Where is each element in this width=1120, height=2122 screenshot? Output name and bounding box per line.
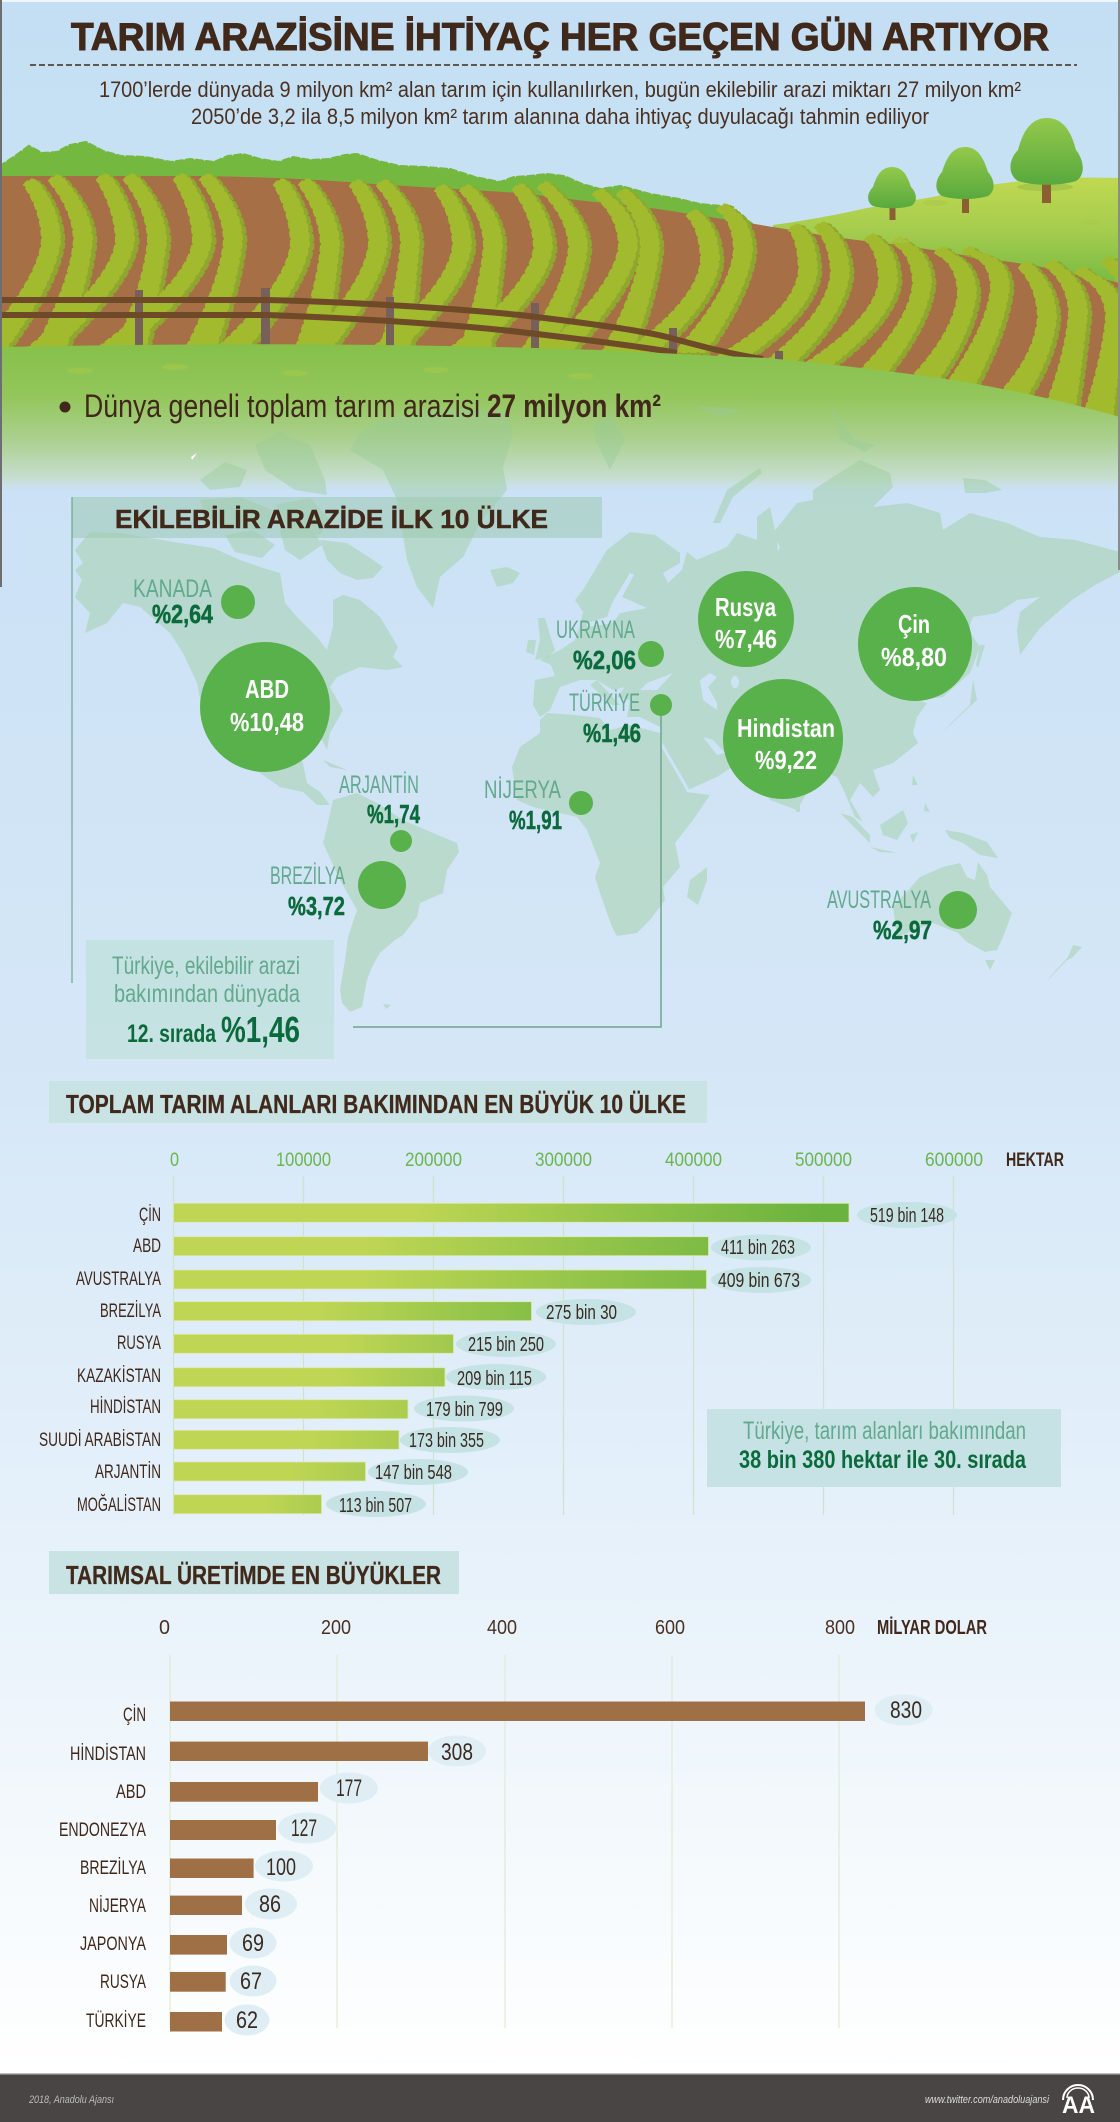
- callout: Türkiye farmland rank: 38 bin 380 hektar ile 30. sırada: [739, 1446, 1027, 1474]
- foreground meadow: [0, 344, 1120, 490]
- callout: world farmland total: Dünya geneli toplam tarım arazisi: [84, 388, 480, 424]
- country labels: production: ENDONEZYA: [59, 1820, 146, 1841]
- bubble: Nijerya: [484, 775, 593, 835]
- map: Australia and New Zealand: [893, 862, 1082, 980]
- country labels: farmland: BREZİLYA: [100, 1301, 161, 1322]
- value circles: [224, 1694, 933, 2036]
- axis labels: hectares: 0: [170, 1150, 179, 1171]
- bubble: Kanada: %2,64: [152, 599, 213, 629]
- heading: arable land: [72, 497, 602, 538]
- callout: Türkiye arable rank: %1,46: [221, 1009, 300, 1050]
- bubble: ABD: %10,48: [230, 707, 304, 737]
- icon: large tree: [1010, 118, 1083, 203]
- values: farmland: 147 bin 548: [375, 1462, 452, 1484]
- heading: total farmland: [49, 1081, 707, 1123]
- map: inland seas: [333, 573, 739, 790]
- values: production: 830: [890, 1697, 922, 1724]
- axis labels: billion dollars: 200: [321, 1617, 351, 1639]
- axis labels: hectares: 400000: [665, 1150, 722, 1171]
- bubble: Hindistan: %9,22: [755, 745, 817, 775]
- bubble: Ukrayna: %2,06: [573, 645, 636, 675]
- values: farmland: 519 bin 148: [870, 1205, 944, 1227]
- bubble: Türkiye: %1,46: [583, 718, 641, 748]
- country labels: production: RUSYA: [100, 1972, 146, 1993]
- country labels: farmland: MOĞALİSTAN: [77, 1494, 161, 1516]
- bubble: Rusya: Rusya: [715, 592, 776, 622]
- values: production: 100: [266, 1854, 296, 1881]
- values: production: [236, 1697, 922, 2034]
- values: farmland: 209 bin 115: [457, 1368, 532, 1390]
- country labels: farmland: HİNDİSTAN: [90, 1397, 161, 1418]
- bars: farmland by country: [174, 1203, 849, 1514]
- axis labels: hectares: 100000: [276, 1150, 331, 1171]
- icon: small tree: [868, 167, 916, 220]
- panel: total farmland bar chart: [39, 1081, 1064, 1517]
- wooden fence: [0, 288, 783, 361]
- values: production: 308: [441, 1739, 473, 1766]
- bubble: Hindistan: [723, 679, 843, 799]
- callout: Türkiye farmland rank: Türkiye, tarım alanları bakımından: [743, 1417, 1026, 1445]
- subtitle text block: 1700’lerde dünyada 9 milyon km² alan tarım için kullanılırken, bugün ekilebilir arazi miktarı 27 milyon km²: [99, 77, 1021, 102]
- bubble: Brezilya: [270, 861, 406, 921]
- country labels: farmland: RUSYA: [117, 1333, 161, 1354]
- values: production: 86: [259, 1891, 281, 1918]
- bubble: Kanada: KANADA: [133, 575, 212, 603]
- values: farmland: 275 bin 30: [546, 1302, 617, 1324]
- bubble: Çin: Çin: [898, 609, 930, 639]
- axis labels: billion dollars: [159, 1616, 987, 1639]
- axis labels: hectares: 600000: [925, 1150, 983, 1171]
- subtitle text block: 2050’de 3,2 ila 8,5 milyon km² tarım alanına daha ihtiyaç duyulacağı tahmin ediliyor: [191, 104, 929, 129]
- panel: agricultural production bar chart: [49, 1551, 987, 2036]
- country labels: production: TÜRKİYE: [86, 2011, 146, 2032]
- country labels: farmland: ABD: [133, 1236, 161, 1257]
- subtitle text block: [99, 77, 1021, 129]
- icon: AA logo: AA: [1062, 2092, 1095, 2119]
- hill with grass: [773, 178, 1120, 300]
- ploughed brown field: [0, 176, 1120, 440]
- panel: world map background: [75, 405, 1120, 1012]
- values: production: 177: [336, 1775, 362, 1802]
- map: South-East Asia islands: [840, 775, 998, 858]
- bubble: Brezilya: BREZİLYA: [270, 861, 345, 890]
- callout: Türkiye arable rank: 12. sırada: [127, 1020, 217, 1048]
- country labels: farmland: ÇİN: [139, 1205, 161, 1226]
- callout: Türkiye arable rank: bakımından dünyada: [114, 980, 300, 1008]
- map: Eurasia: [533, 460, 1120, 822]
- callout: Türkiye arable rank: Türkiye, ekilebilir arazi: [112, 952, 300, 980]
- country labels: farmland: KAZAKİSTAN: [77, 1366, 161, 1387]
- values: farmland: 411 bin 263: [721, 1237, 795, 1259]
- bubble: Brezilya: %3,72: [288, 891, 345, 921]
- bubble: Avustralya: AVUSTRALYA: [827, 886, 931, 914]
- bubble: Arjantin: [339, 770, 420, 852]
- axis labels: hectares: 200000: [405, 1150, 462, 1171]
- crop rows: [0, 174, 1120, 432]
- axis labels: billion dollars: 600: [655, 1617, 685, 1639]
- bubble: Ukrayna: UKRAYNA: [556, 616, 635, 644]
- panel: footer: [0, 2073, 1120, 2122]
- bubble: Nijerya: %1,91: [509, 805, 562, 835]
- panel: top 10 arable land map: [72, 497, 977, 1059]
- values: production: 62: [236, 2007, 258, 2034]
- credit: 2018, Anadolu Ajansı: [28, 2094, 114, 2106]
- bubble: Ukrayna: [556, 616, 664, 675]
- axis labels: billion dollars: 400: [487, 1617, 517, 1639]
- country labels: production: HİNDİSTAN: [70, 1744, 146, 1765]
- value pills: [326, 1202, 957, 1517]
- country labels: farmland: SUUDİ ARABİSTAN: [39, 1430, 161, 1451]
- callout: Türkiye arable rank: [86, 940, 334, 1059]
- country labels: production: ABD: [116, 1782, 146, 1803]
- axis labels: hectares: HEKTAR: [1006, 1150, 1064, 1171]
- bubble: Türkiye: TÜRKİYE: [569, 688, 640, 717]
- map: North America: [75, 532, 403, 805]
- axis labels: billion dollars: 0: [159, 1617, 170, 1639]
- bubble: Avustralya: %2,97: [873, 915, 932, 945]
- bars: production by country: [170, 1702, 865, 2032]
- map: Africa and Madagascar: [512, 713, 710, 936]
- heading: agricultural production: TARIMSAL ÜRETİMDE EN BÜYÜKLER: [66, 1560, 441, 1590]
- map: Greenland: [350, 410, 513, 608]
- values: farmland: 409 bin 673: [718, 1270, 800, 1292]
- country labels: production: NİJERYA: [89, 1896, 146, 1917]
- bubble: Türkiye: [569, 688, 672, 748]
- country labels: farmland: [39, 1205, 161, 1516]
- country labels: farmland: ARJANTİN: [95, 1462, 161, 1483]
- panel: farm landscape illustration: [0, 118, 1120, 490]
- bubble: ABD: ABD: [245, 674, 289, 704]
- axis labels: hectares: 500000: [795, 1150, 852, 1171]
- link: www.twitter.com/anadoluajansi: [925, 2094, 1049, 2106]
- axis labels: billion dollars: MİLYAR DOLAR: [877, 1616, 987, 1639]
- bubble: Kanada: [133, 575, 255, 629]
- values: production: 69: [242, 1930, 264, 1957]
- callout: Türkiye farmland rank: [707, 1409, 1061, 1487]
- country labels: production: JAPONYA: [80, 1934, 146, 1955]
- country labels: production: ÇİN: [123, 1705, 146, 1726]
- callout: world farmland total: 27 milyon km²: [487, 388, 661, 424]
- title: TARIM ARAZİSİNE İHTİYAÇ HER GEÇEN GÜN ARTIYOR: [71, 16, 1049, 59]
- values: farmland: 179 bin 799: [426, 1399, 503, 1421]
- values: production: 67: [240, 1968, 262, 1995]
- bubble: Çin: %8,80: [881, 642, 947, 672]
- map: South America: [323, 760, 459, 1012]
- bubble: Çin: [858, 587, 972, 701]
- country labels: production: [59, 1705, 146, 2032]
- bubble: Arjantin: %1,74: [367, 799, 420, 829]
- axis labels: hectares: 300000: [535, 1150, 592, 1171]
- bubble: Rusya: [698, 571, 794, 667]
- country labels: production: BREZİLYA: [80, 1858, 146, 1879]
- bubble: Avustralya: [827, 886, 977, 945]
- bubble: ABD: [200, 642, 330, 772]
- country labels: farmland: AVUSTRALYA: [76, 1269, 161, 1290]
- values: farmland: [339, 1205, 944, 1517]
- heading: arable land: EKİLEBİLİR ARAZİDE İLK 10 ÜLKE: [115, 504, 548, 534]
- axis labels: billion dollars: 800: [825, 1617, 855, 1639]
- values: farmland: 113 bin 507: [339, 1495, 412, 1517]
- bubble: Rusya: %7,46: [715, 624, 777, 654]
- bubble: Arjantin: ARJANTİN: [339, 770, 419, 799]
- heading: total farmland: TOPLAM TARIM ALANLARI BAKIMINDAN EN BÜYÜK 10 ÜLKE: [66, 1089, 686, 1119]
- bubble: Nijerya: NİJERYA: [484, 775, 561, 804]
- map: Iceland, UK and Ireland: [490, 567, 555, 660]
- grass tufts: [67, 200, 1100, 379]
- map: Arctic islands: [200, 405, 1002, 580]
- bushes behind field: [0, 143, 752, 260]
- values: production: 127: [291, 1815, 317, 1842]
- axis labels: hectares: [170, 1150, 1064, 1171]
- values: farmland: 215 bin 250: [468, 1334, 544, 1356]
- values: farmland: 173 bin 355: [409, 1430, 484, 1452]
- bubble: Hindistan: Hindistan: [737, 713, 835, 743]
- icon: medium tree: [936, 147, 994, 213]
- heading: agricultural production: [49, 1551, 459, 1594]
